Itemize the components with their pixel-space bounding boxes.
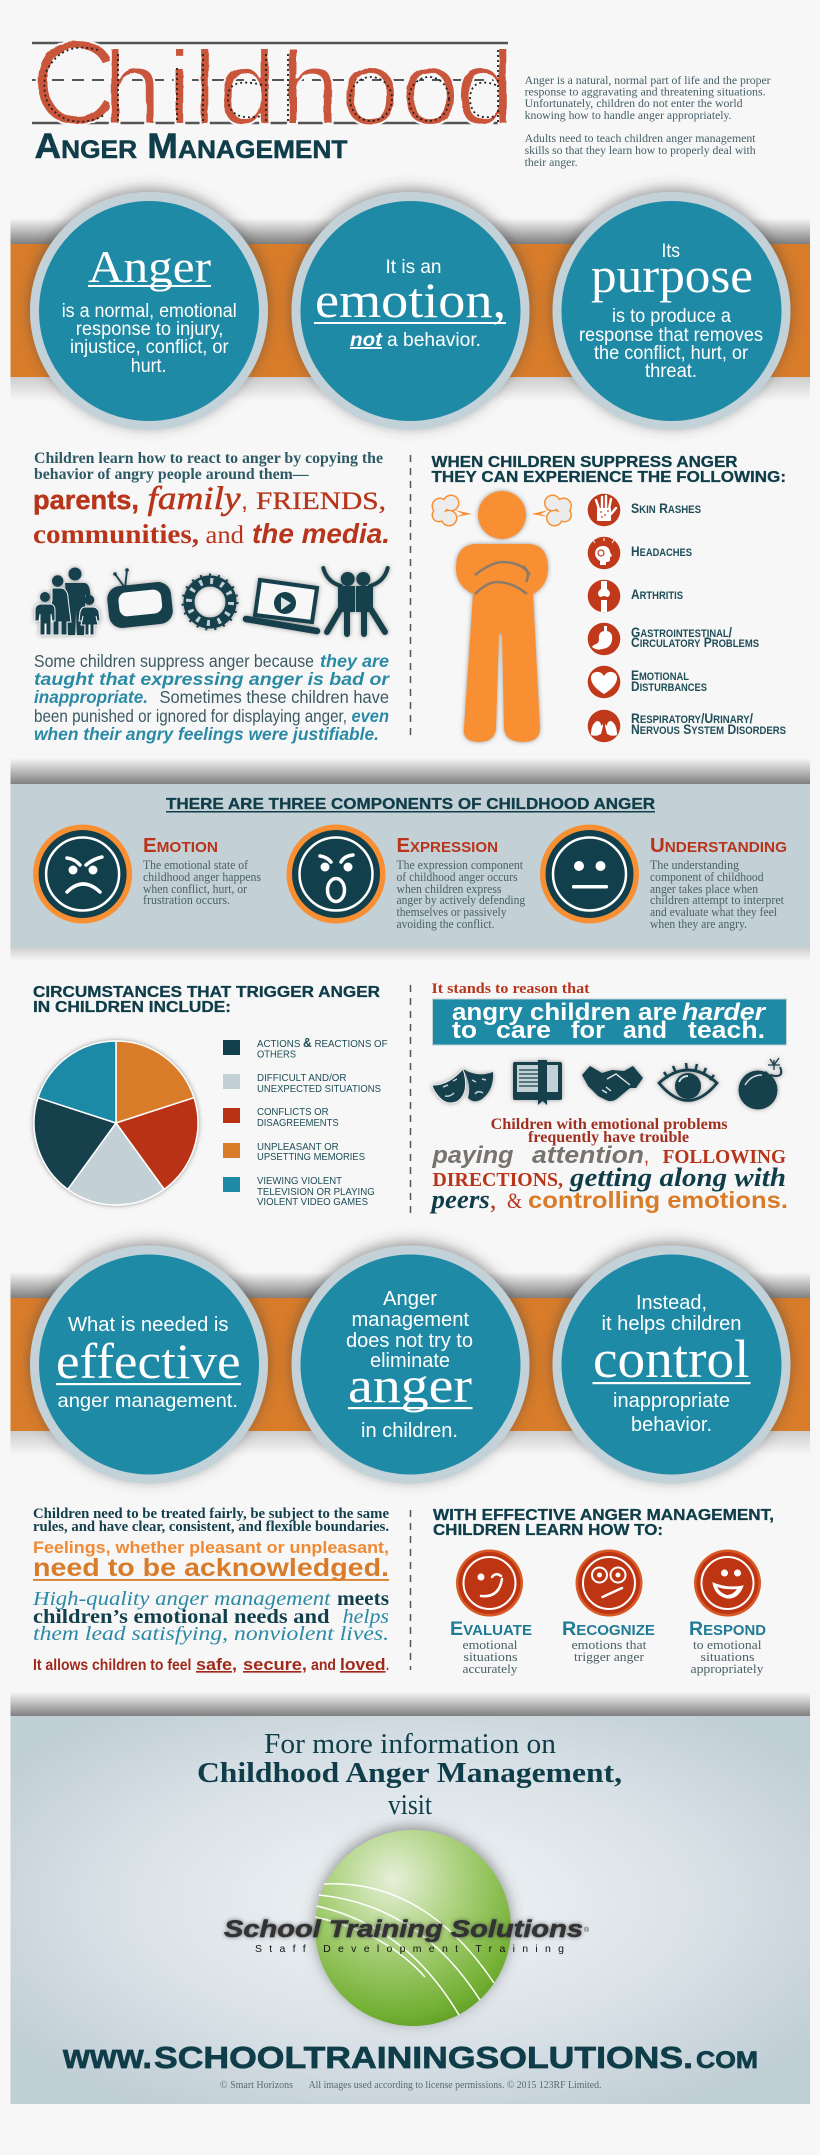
legend: CONFLICTS OR [257, 1106, 329, 1118]
text: for more information [197, 1729, 622, 1821]
symptom: emotional disturbances: EMOTIONAL [631, 667, 689, 683]
text: trouble lead-in: Children with emotional problems [491, 1116, 728, 1133]
symptom: gastrointestinal: CIRCULATORY PROBLEMS [631, 634, 759, 650]
text: trouble lead-in: frequently have trouble [528, 1129, 689, 1146]
influences list: family [148, 481, 241, 517]
panel: triggers [33, 984, 388, 1208]
circle: purpose: threat. [645, 361, 697, 382]
influences list: parents, [33, 485, 139, 515]
panel: fairness and feelings [32, 1506, 390, 1674]
circle: control [552, 1246, 790, 1484]
text: fair treatment [33, 1506, 390, 1535]
text: website url: COM [696, 2047, 758, 2074]
circle: control: it helps children [602, 1313, 742, 1335]
paragraph: suppressing anger: Sometimes these children have [160, 687, 389, 707]
symptom: respiratory [588, 710, 786, 742]
component: understanding: anger takes place when [650, 882, 759, 896]
text: high-quality anger management: High-quality anger management [32, 1588, 331, 1610]
panel: how children learn [33, 450, 390, 744]
circle: Anger definition: injustice, conflict, or [70, 337, 229, 358]
symptom: arthritis: ARTHRITIS [631, 586, 683, 602]
text: copyright: © Smart Horizons [220, 2079, 293, 2091]
component: understanding: when they are angry. [650, 917, 747, 931]
logo: School Training Solutions: ® [584, 1926, 590, 1934]
text: website url [62, 2038, 758, 2076]
icon row: masks, book, handshake, eye, bomb [432, 1058, 781, 1110]
heading [433, 1507, 774, 1539]
icon: angry figure with steam [433, 491, 570, 742]
heading: WITH EFFECTIVE ANGER MANAGEMENT, [433, 1507, 774, 1524]
icon: community ring [183, 575, 237, 629]
text: safe, secure, loved: secure, [243, 1656, 307, 1674]
ruled handwriting lines [32, 43, 508, 123]
component: understanding: and evaluate what they feel [650, 905, 777, 919]
intro text: response to aggravating and threatening situations. [525, 84, 766, 98]
circle: control: Instead, [636, 1292, 707, 1314]
influences list: and [206, 522, 245, 549]
logo: School Training Solutions [224, 1830, 590, 2026]
paragraph: suppressing anger [34, 651, 390, 744]
intro text: Unfortunately, children do not enter the world [525, 96, 743, 110]
circle: emotion [292, 192, 530, 430]
component: understanding: The understanding [650, 858, 740, 872]
circle: does not eliminate anger: anger [348, 1357, 472, 1413]
component: understanding [540, 824, 787, 931]
influences list: , [241, 488, 248, 515]
text: safe, secure, loved [33, 1656, 389, 1674]
paragraph: suppressing anger: when their angry feelings were justifiable. [34, 724, 379, 744]
symptom: respiratory: NERVOUS SYSTEM DISORDERS [631, 721, 786, 737]
text: problem list: , [644, 1143, 649, 1168]
symptom: emotional disturbances: DISTURBANCES [631, 678, 707, 694]
symptom: respiratory: RESPIRATORY/URINARY/ [631, 710, 753, 726]
circle: control: control [593, 1329, 750, 1389]
skill: respond [689, 1550, 766, 1676]
skill: recognize [562, 1550, 655, 1664]
component: expression: themselves or passively [396, 905, 507, 919]
callout box [432, 999, 786, 1045]
symptom: gastrointestinal: GASTROINTESTINAL/ [631, 624, 732, 640]
intro text [525, 73, 771, 169]
symptom: skin rashes: SKIN RASHES [631, 500, 701, 516]
circle: effective [30, 1246, 268, 1484]
paragraph: suppressing anger: even [352, 706, 389, 726]
text: for more information: For more information on [264, 1729, 556, 1760]
circle: effective: What is needed is [68, 1314, 228, 1336]
component: expression: when children express [396, 882, 502, 896]
symptom: headaches: HEADACHES [631, 543, 692, 559]
callout box: and [623, 1017, 667, 1044]
heading [432, 454, 786, 486]
text: trouble lead-in [491, 1116, 728, 1146]
paragraph: suppressing anger: been punished or ignored for displaying anger, [34, 706, 347, 726]
icon: eye [659, 1063, 717, 1100]
paragraph: suppressing anger: taught that expressing anger is bad or [34, 669, 390, 689]
circle: purpose: purpose [591, 247, 753, 303]
circle: does not eliminate anger: Anger [383, 1288, 437, 1310]
text: safe, secure, loved: It allows children to feel [33, 1657, 191, 1674]
symptom: emotional disturbances [588, 666, 707, 698]
icon: television [106, 568, 174, 629]
panel: what children learn [433, 1507, 774, 1676]
logo: School Training Solutions: Staff Development Training [255, 1943, 564, 1955]
icon row: family, tv, community, laptop, friends [35, 568, 388, 635]
text: problem list [429, 1142, 788, 1214]
icon: cheering friends [323, 568, 388, 634]
influences list: FRIENDS, [256, 488, 386, 515]
icon: steam left [433, 496, 472, 525]
component: expression: avoiding the conflict. [396, 917, 494, 931]
skill: respond: to emotional [693, 1637, 762, 1652]
heading: CIRCUMSTANCES THAT TRIGGER ANGER [33, 984, 380, 1001]
symptom: headaches [588, 537, 692, 569]
skill: evaluate [450, 1550, 532, 1676]
component: understanding: component of childhood [650, 870, 764, 884]
intro text: Adults need to teach children anger management [525, 131, 756, 145]
circle: does not eliminate anger [292, 1246, 530, 1484]
skill: respond: situations [700, 1649, 754, 1664]
icon: book [513, 1060, 562, 1105]
lead text: behavior of angry people around them— [34, 466, 310, 483]
skill: respond: appropriately [690, 1661, 764, 1676]
heading [33, 984, 380, 1016]
heading: THERE ARE THREE COMPONENTS OF CHILDHOOD ANGER [166, 796, 655, 813]
text: copyright: All images used according to license permissions. © 2015 123RF Limited. [309, 2079, 602, 2091]
component: expression: of childhood anger occurs [396, 870, 518, 884]
paragraph: suppressing anger: Some children suppress anger because [34, 651, 314, 671]
title block [31, 16, 514, 166]
text: problem list: attention [532, 1142, 644, 1169]
icon: steam right [532, 496, 570, 525]
circle: Anger definition: Anger [88, 241, 211, 292]
circle: purpose: the conflict, hurt, or [594, 343, 749, 364]
circle: does not eliminate anger: does not try to [346, 1330, 473, 1352]
symptom: arthritis [588, 580, 683, 612]
text: problem list: & [507, 1188, 522, 1213]
text: feelings [33, 1538, 389, 1582]
text: safe, secure, loved: . [386, 1657, 389, 1674]
text: high-quality anger management: children’s emotional needs and [33, 1606, 330, 1628]
circle: emotion: a behavior. [387, 330, 481, 351]
text: website url: SCHOOLTRAININGSOLUTIONS. [154, 2040, 693, 2075]
text: safe, secure, loved: and [311, 1657, 336, 1674]
callout box: for [571, 1017, 605, 1044]
skill: evaluate: emotional [462, 1637, 518, 1652]
circle: Anger definition [30, 192, 268, 430]
heading: CHILDREN LEARN HOW TO: [433, 1522, 663, 1539]
logo: School Training Solutions: School Training Solutions [224, 1916, 583, 1943]
circle: emotion: not [350, 330, 383, 351]
circle: Anger definition: response to injury, [76, 319, 223, 340]
icon: family [35, 568, 100, 635]
text: fair treatment: Children need to be treated fairly, be subject to the same [33, 1506, 390, 1522]
pie chart [34, 1041, 198, 1205]
text: feelings: need to be acknowledged. [33, 1554, 389, 1582]
circle: purpose: response that removes [579, 325, 763, 346]
text: problem list: controlling emotions. [528, 1187, 788, 1213]
circle: Anger definition: hurt. [131, 356, 166, 377]
panel: effects of suppressed anger [432, 454, 786, 742]
text: problem list: FOLLOWING [663, 1146, 786, 1168]
lead text: Children learn how to react to anger by copying the [34, 450, 383, 467]
circle: purpose: is to produce a [612, 306, 731, 327]
intro text: their anger. [525, 155, 578, 169]
legend: VIOLENT VIDEO GAMES [257, 1196, 368, 1208]
symptom: skin rashes [588, 494, 701, 526]
component: emotion: childhood anger happens [143, 870, 261, 884]
icon: theatre masks [432, 1069, 493, 1103]
panel: footer call to action [10, 1692, 810, 2104]
circle: does not eliminate anger: eliminate [370, 1350, 450, 1372]
paragraph: suppressing anger: they are [320, 651, 389, 671]
circle: emotion: emotion, [315, 272, 506, 328]
callout box: angry children are [452, 999, 677, 1026]
callout box: teach. [688, 1017, 765, 1044]
component: expression: EXPRESSION [396, 835, 498, 857]
icon: bomb [738, 1058, 781, 1110]
text: feelings: Feelings, whether pleasant or unpleasant, [33, 1538, 389, 1557]
heading: IN CHILDREN INCLUDE: [33, 999, 231, 1016]
heading: WHEN CHILDREN SUPPRESS ANGER [432, 454, 738, 471]
influences list: communities, [33, 519, 199, 549]
callout box: to [452, 1017, 477, 1044]
text: fair treatment: rules, and have clear, consistent, and flexible boundaries. [33, 1519, 389, 1535]
title: Childhood: C [31, 16, 118, 150]
component: emotion: frustration occurs. [143, 893, 230, 907]
text: website url: www. [62, 2038, 152, 2076]
text: safe, secure, loved: loved [340, 1656, 386, 1674]
text: problem list: peers, [429, 1185, 496, 1214]
subtitle: Anger Management: ANGER MANAGEMENT [34, 127, 348, 166]
circle: emotion: It is an [386, 257, 442, 278]
circle: effective: effective [56, 1333, 241, 1389]
intro text: knowing how to handle anger appropriately. [525, 108, 732, 122]
lead text [34, 450, 383, 483]
text: high-quality anger management [32, 1588, 389, 1645]
lead-in text: It stands to reason that [432, 981, 590, 997]
legend [223, 1035, 388, 1208]
symptom: gastrointestinal [588, 623, 759, 655]
text: high-quality anger management: helps [343, 1606, 389, 1628]
text: safe, secure, loved: safe, [196, 1656, 237, 1674]
legend: UNEXPECTED SITUATIONS [257, 1083, 381, 1095]
heading: THEY CAN EXPERIENCE THE FOLLOWING: [432, 469, 786, 486]
legend: VIEWING VIOLENT [257, 1175, 343, 1187]
orange band with definition circles [10, 192, 810, 430]
icon: handshake [582, 1066, 643, 1101]
legend: DISAGREEMENTS [257, 1117, 339, 1129]
skill: evaluate: EVALUATE [450, 1619, 532, 1640]
paragraph: suppressing anger: inappropriate. [34, 687, 148, 707]
text: problem list: getting along with [569, 1163, 786, 1192]
component: emotion: EMOTION [143, 835, 218, 857]
title: Childhood: hildhood [103, 30, 514, 147]
legend: TELEVISION OR PLAYING [257, 1186, 375, 1198]
text: for more information: visit [388, 1790, 432, 1821]
component: emotion: The emotional state of [143, 858, 249, 872]
component: understanding: UNDERSTANDING [650, 835, 787, 857]
circle: control: behavior. [631, 1414, 712, 1436]
text: for more information: Childhood Anger Management, [197, 1757, 622, 1789]
skill: recognize: trigger anger [574, 1649, 645, 1664]
circle: does not eliminate anger: in children. [361, 1420, 458, 1442]
circle: does not eliminate anger: management [352, 1309, 469, 1331]
orange band with anger management circles [10, 1246, 810, 1484]
intro text: skills so that they learn how to properly deal with [525, 143, 756, 157]
skill: evaluate: accurately [462, 1661, 518, 1676]
circle: control: inappropriate [613, 1390, 730, 1412]
skill: evaluate: situations [464, 1649, 518, 1664]
component: emotion: when conflict, hurt, or [143, 882, 248, 896]
text: high-quality anger management: meets [337, 1588, 389, 1610]
influences list: the media. [252, 518, 390, 549]
skill: respond: RESPOND [689, 1619, 766, 1640]
component: understanding: children attempt to interpret [650, 893, 784, 907]
circle: Anger definition: is a normal, emotional [62, 301, 237, 322]
component: expression: anger by actively defending [396, 893, 526, 907]
legend: UNPLEASANT OR [257, 1141, 339, 1153]
circle: purpose [552, 192, 790, 430]
panel: harder to care for [429, 981, 788, 1214]
text: high-quality anger management: them lead satisfying, nonviolent lives. [33, 1623, 389, 1645]
influences list [33, 481, 390, 549]
callout box: harder [682, 999, 767, 1026]
component: emotion [33, 824, 261, 924]
intro text: Anger is a natural, normal part of life and the proper [525, 73, 771, 87]
legend: UPSETTING MEMORIES [257, 1151, 365, 1163]
icon: laptop video [246, 580, 317, 631]
circle: effective: anger management. [58, 1390, 238, 1412]
component: expression: The expression component [396, 858, 523, 872]
legend: DIFFICULT AND/OR [257, 1072, 347, 1084]
component: expression [286, 824, 526, 931]
text: problem list: DIRECTIONS, [432, 1169, 563, 1191]
skill: recognize: emotions that [572, 1637, 647, 1652]
panel: three components [10, 758, 810, 961]
legend: OTHERS [257, 1048, 296, 1060]
circle: purpose: Its [662, 241, 680, 262]
text: problem list: paying [431, 1142, 514, 1169]
legend: ACTIONS & REACTIONS OF [257, 1035, 388, 1050]
callout box: care [496, 1017, 551, 1044]
skill: recognize: RECOGNIZE [562, 1619, 655, 1640]
